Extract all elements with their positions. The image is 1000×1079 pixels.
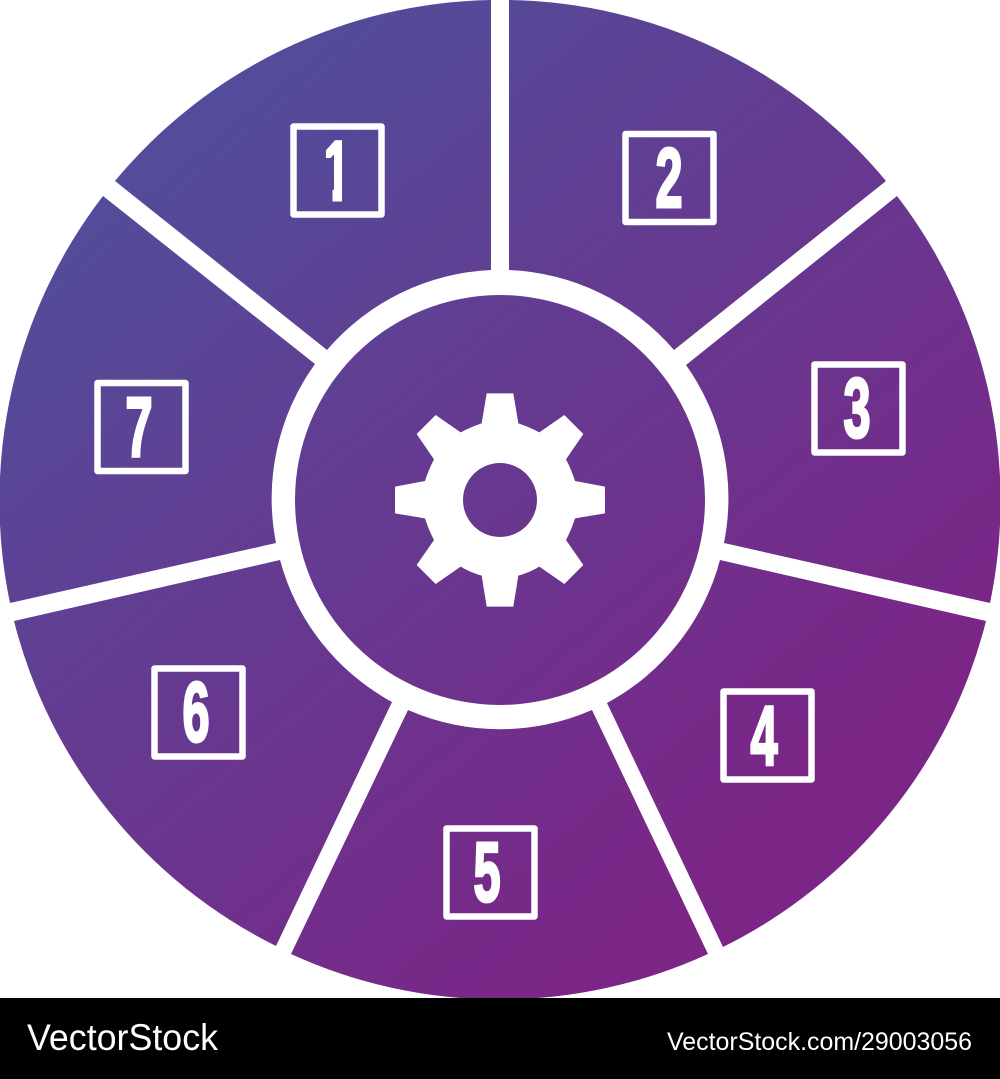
segment 1: 1 (323, 124, 351, 218)
segment 5: 5 (473, 825, 501, 919)
segment 2: 2 (655, 131, 683, 225)
segment 4: 4 (750, 689, 778, 783)
segment 6: 6 (182, 665, 210, 759)
segment 1 (115, 0, 491, 350)
segment 7: 7 (125, 380, 153, 474)
center hub (295, 295, 705, 705)
segment 2 (509, 0, 886, 350)
segment 4 (607, 560, 986, 947)
segment 5 (291, 710, 708, 1000)
footer bar (0, 998, 1000, 1079)
footer image id: VectorStock.com/29003056 (667, 1028, 972, 1056)
segment 3 (686, 196, 1000, 603)
segment 6 (14, 560, 392, 946)
icon: gear (395, 393, 605, 607)
segment 7 (0, 196, 315, 603)
segment 3: 3 (843, 361, 871, 455)
footer brand: VectorStock (27, 1017, 218, 1058)
